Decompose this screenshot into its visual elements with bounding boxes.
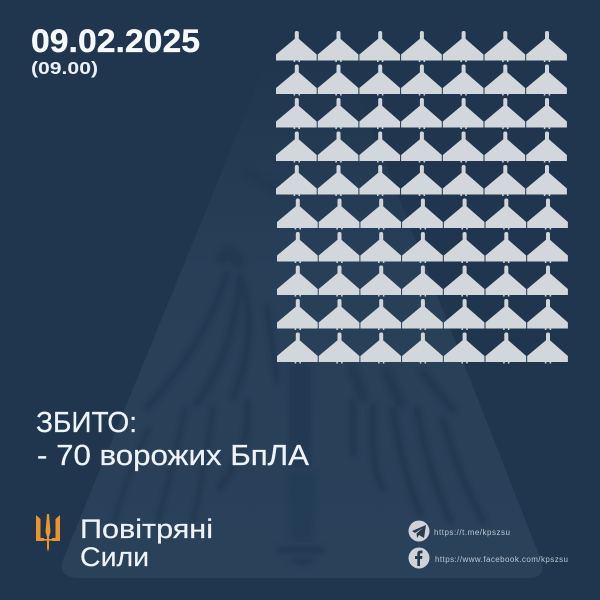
time: (09.00) [31, 58, 98, 78]
brand name: Сили [80, 542, 149, 572]
brand name: Повітряні [80, 514, 213, 544]
headline: 70 enemy UAVs: - 70 ворожих БпЛА [37, 440, 310, 472]
brand name [80, 514, 213, 572]
headline: shot down: ЗБИТО: [36, 407, 137, 439]
icon: trident [36, 514, 60, 552]
drone grid: 70 drones [276, 31, 568, 364]
facebook link: https://www.facebook.com/kpszsu [435, 555, 568, 564]
icon: telegram [408, 520, 430, 542]
icon: facebook [408, 548, 430, 568]
telegram link: https://t.me/kpszsu [434, 528, 510, 537]
emblem watermark [62, 0, 542, 578]
date: 09.02.2025 [31, 23, 200, 59]
